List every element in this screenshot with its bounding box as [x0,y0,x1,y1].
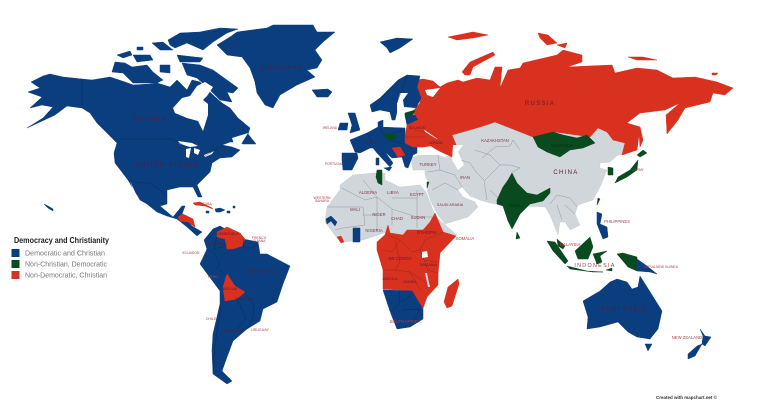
country labels: IRAN [460,175,470,180]
country labels: COLOMBIA [208,242,227,246]
country labels: DR CONGO [388,256,412,261]
seas [413,88,464,170]
country labels: MALAYSIA [560,242,581,247]
country labels: FRENCH [252,236,267,240]
region: Asia and Middle East [411,122,625,235]
region: Greenland [217,25,413,108]
country labels: ZAMBIA [403,280,417,284]
country labels: ANGOLA [383,277,398,281]
legend title: Democracy and Christianity [14,236,109,245]
country labels: KAZAKHSTAN [481,138,509,143]
country labels: FRANCE [363,141,378,145]
country labels: ECUADOR [183,251,200,255]
country labels: PERU [208,275,218,279]
country labels: BOLIVIA [223,287,238,291]
country labels: WESTERN [314,196,331,200]
country labels: UKRAINE [428,141,444,145]
country labels: GUIANA [252,239,266,243]
country labels [134,65,702,340]
region: South America [200,226,290,384]
region: Africa [325,170,459,329]
country labels: NEW ZEALAND [672,335,702,340]
India and East Asia democracies [497,132,647,272]
country labels: ETHIOPIA [417,230,437,235]
country labels: VENEZUELA [217,232,239,236]
legend item: non-democratic, Christian: Non-Democratic, Christian [25,270,107,280]
credit: Created with mapchart.net © [656,394,718,400]
country labels: SUDAN [411,215,425,220]
country labels: PARAGUAY [235,297,255,301]
country labels: TURKEY [420,162,437,167]
country labels: NIGERIA [365,228,383,233]
country labels: URUGUAY [251,328,269,332]
country labels: ARGENTINA [223,329,244,333]
country labels: CHAD [391,216,403,221]
country labels: SPAIN [348,157,359,161]
country labels: SAUDI ARABIA [437,203,464,207]
legend item: democratic and Christian: Democratic and Christian [25,248,105,258]
country labels: INDIA [509,203,521,208]
Oceania and Philippines [583,212,711,359]
country labels: SOMALIA [456,236,475,241]
country labels: CHILE [206,317,217,321]
region: Russia [414,32,733,157]
country labels: PORTUGAL [325,162,343,166]
country labels: SOUTH AFRICA [390,319,421,324]
country labels: ALGERIA [359,190,377,195]
country labels: IRELAND [323,126,338,130]
country labels: INDONESIA [574,263,616,269]
country labels: AUSTRALIA [601,307,647,313]
country labels: BRAZIL [250,269,276,275]
legend [12,236,109,280]
country labels: MALI [350,207,360,212]
legend item: non-Christian, democratic: Non-Christian, Democratic [25,260,107,268]
country labels: EGYPT [410,192,425,197]
country labels: CUBA [202,202,212,206]
region: Europe [338,75,438,171]
country labels: TANZANIA [419,263,437,267]
country labels: RUSSIA [525,101,555,107]
Central America and Caribbean [178,202,235,227]
Hudson Bay and Great Lakes [130,82,248,201]
country labels: CHINA [553,170,579,176]
country labels: JAPAN [633,168,644,172]
country labels: MONGOLIA [551,143,573,148]
country labels: NIGER [372,212,386,217]
country labels: BELARUS [409,126,426,130]
country labels: PHILIPPINES [604,219,630,224]
country labels: CANADA [134,117,166,123]
country labels: UNITED STATES [135,163,199,169]
country labels: SAHARA [315,199,330,203]
country labels: PAPUA NEW GUINEA [644,265,679,269]
region: North America [27,28,256,236]
country labels: LIBYA [387,190,399,195]
country labels: GREENLAND [260,65,302,71]
